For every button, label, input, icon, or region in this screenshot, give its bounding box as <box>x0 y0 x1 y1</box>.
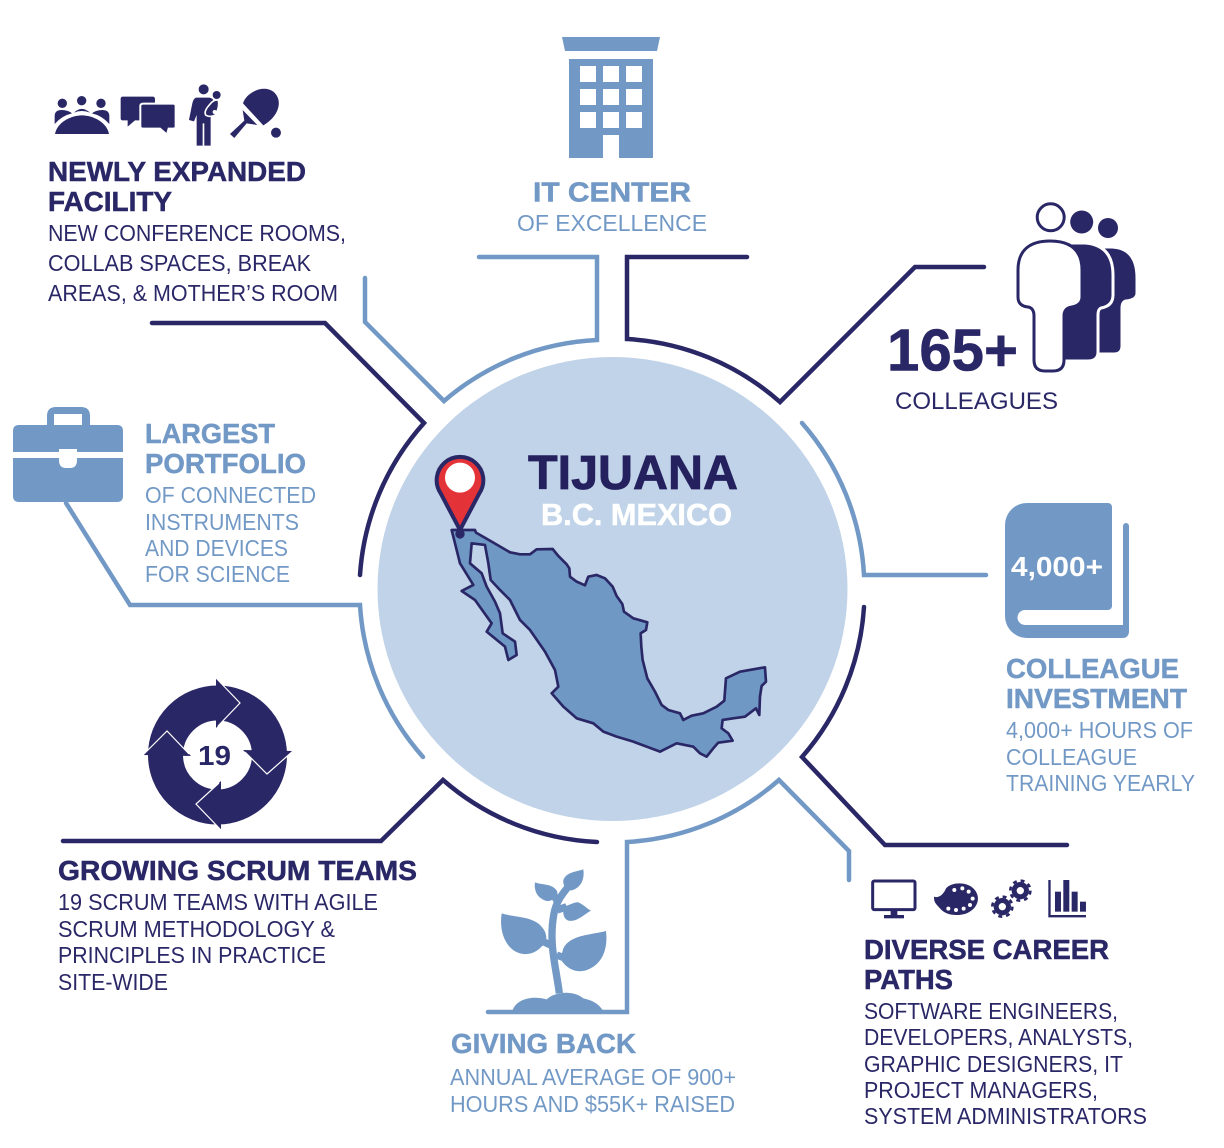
connector: portfolio <box>66 503 423 757</box>
text: growing scrum teams <box>58 855 417 995</box>
text: giving back <box>450 1028 736 1117</box>
text: diverse career paths: PATHS <box>864 964 953 995</box>
text: IT center <box>517 176 707 236</box>
text: newly expanded facility <box>48 156 346 306</box>
text: diverse career paths <box>864 934 1147 1129</box>
text: largest portfolio: OF CONNECTED <box>145 482 316 508</box>
text: growing scrum teams: SCRUM METHODOLOGY & <box>58 916 335 942</box>
connector: IT center <box>365 257 597 401</box>
text: colleague investment: 4,000+ HOURS OF <box>1006 717 1193 743</box>
text: diverse career paths: DEVELOPERS, ANALYSTS, <box>864 1024 1133 1050</box>
text: colleague investment: COLLEAGUE <box>1006 744 1137 770</box>
text: largest portfolio: AND DEVICES <box>145 535 288 561</box>
text: largest portfolio: PORTFOLIO <box>145 448 306 479</box>
icon: colleagues group <box>1018 204 1137 371</box>
text: giving back: HOURS AND $55K+ RAISED <box>450 1091 735 1117</box>
icon: ping pong paddle <box>230 89 281 138</box>
text: diverse career paths: SYSTEM ADMINISTRATORS <box>864 1103 1147 1129</box>
connector: expanded facility <box>152 323 424 575</box>
text: growing scrum teams: SITE-WIDE <box>58 969 168 995</box>
text: newly expanded facility: NEWLY EXPANDED <box>48 156 306 187</box>
stat: 165+ colleagues: 165+ <box>887 318 1018 384</box>
text: growing scrum teams: PRINCIPLES IN PRACTICE <box>58 942 326 968</box>
text: colleague investment: INVESTMENT <box>1006 683 1187 714</box>
connector: colleague investment <box>802 423 986 575</box>
text: newly expanded facility: FACILITY <box>48 186 172 217</box>
icon: office building <box>562 37 660 158</box>
text: colleague investment: COLLEAGUE <box>1006 653 1179 684</box>
text: giving back: GIVING BACK <box>451 1028 636 1059</box>
connector: colleagues <box>627 257 984 402</box>
text: giving back: ANNUAL AVERAGE OF 900+ <box>450 1064 736 1090</box>
text: largest portfolio: FOR SCIENCE <box>145 561 290 587</box>
icon: briefcase <box>13 407 123 502</box>
connector: scrum teams <box>63 780 597 842</box>
title: Tijuana: TIJUANA <box>528 447 738 500</box>
stat: 165+ colleagues: COLLEAGUES <box>895 388 1058 415</box>
subtitle: B.C. Mexico: B.C. MEXICO <box>541 497 732 532</box>
text: largest portfolio: INSTRUMENTS <box>145 509 299 535</box>
text: largest portfolio: LARGEST <box>145 418 275 449</box>
icon: scrum cycle arrows: 19 <box>198 740 231 771</box>
stat: 165+ colleagues <box>887 318 1058 415</box>
text: diverse career paths: GRAPHIC DESIGNERS, IT <box>864 1051 1123 1077</box>
location pin <box>437 457 483 539</box>
text: newly expanded facility: AREAS, & MOTHER’S ROOM <box>48 280 338 306</box>
map of Mexico <box>452 530 766 757</box>
text: IT center: OF EXCELLENCE <box>517 210 707 236</box>
icon: facility icon row <box>55 84 281 146</box>
text: colleague investment: TRAINING YEARLY <box>1006 770 1195 796</box>
icon: book with 4,000+ <box>1005 503 1129 638</box>
text: largest portfolio <box>145 418 316 587</box>
icon: scrum cycle arrows <box>143 678 293 830</box>
icon: bar chart <box>1048 880 1086 917</box>
connector: giving back <box>488 780 849 1012</box>
text: newly expanded facility: COLLAB SPACES, BREAK <box>48 250 312 276</box>
text: newly expanded facility: NEW CONFERENCE ROOMS, <box>48 220 346 246</box>
text: diverse career paths: PROJECT MANAGERS, <box>864 1077 1098 1103</box>
text: colleague investment <box>1006 653 1195 796</box>
icon: chat bubbles <box>121 97 176 135</box>
connector: diverse career paths <box>802 607 1067 845</box>
icon: career path icon row <box>873 880 1086 918</box>
text: diverse career paths: DIVERSE CAREER <box>864 934 1109 965</box>
icon: growing plant <box>501 869 606 1010</box>
text: growing scrum teams: 19 SCRUM TEAMS WITH AGILE <box>58 889 378 915</box>
center circle <box>378 357 848 821</box>
icon: meeting <box>55 96 109 134</box>
text: diverse career paths: SOFTWARE ENGINEERS, <box>864 998 1118 1024</box>
icon: gears <box>992 881 1030 917</box>
text: IT center: IT CENTER <box>533 176 691 208</box>
text: growing scrum teams: GROWING SCRUM TEAMS <box>58 855 417 886</box>
icon: monitor <box>873 881 915 918</box>
icon: parent carrying child <box>189 84 221 146</box>
icon: palette <box>934 883 978 915</box>
icon: book with 4,000+: 4,000+ <box>1011 551 1103 582</box>
